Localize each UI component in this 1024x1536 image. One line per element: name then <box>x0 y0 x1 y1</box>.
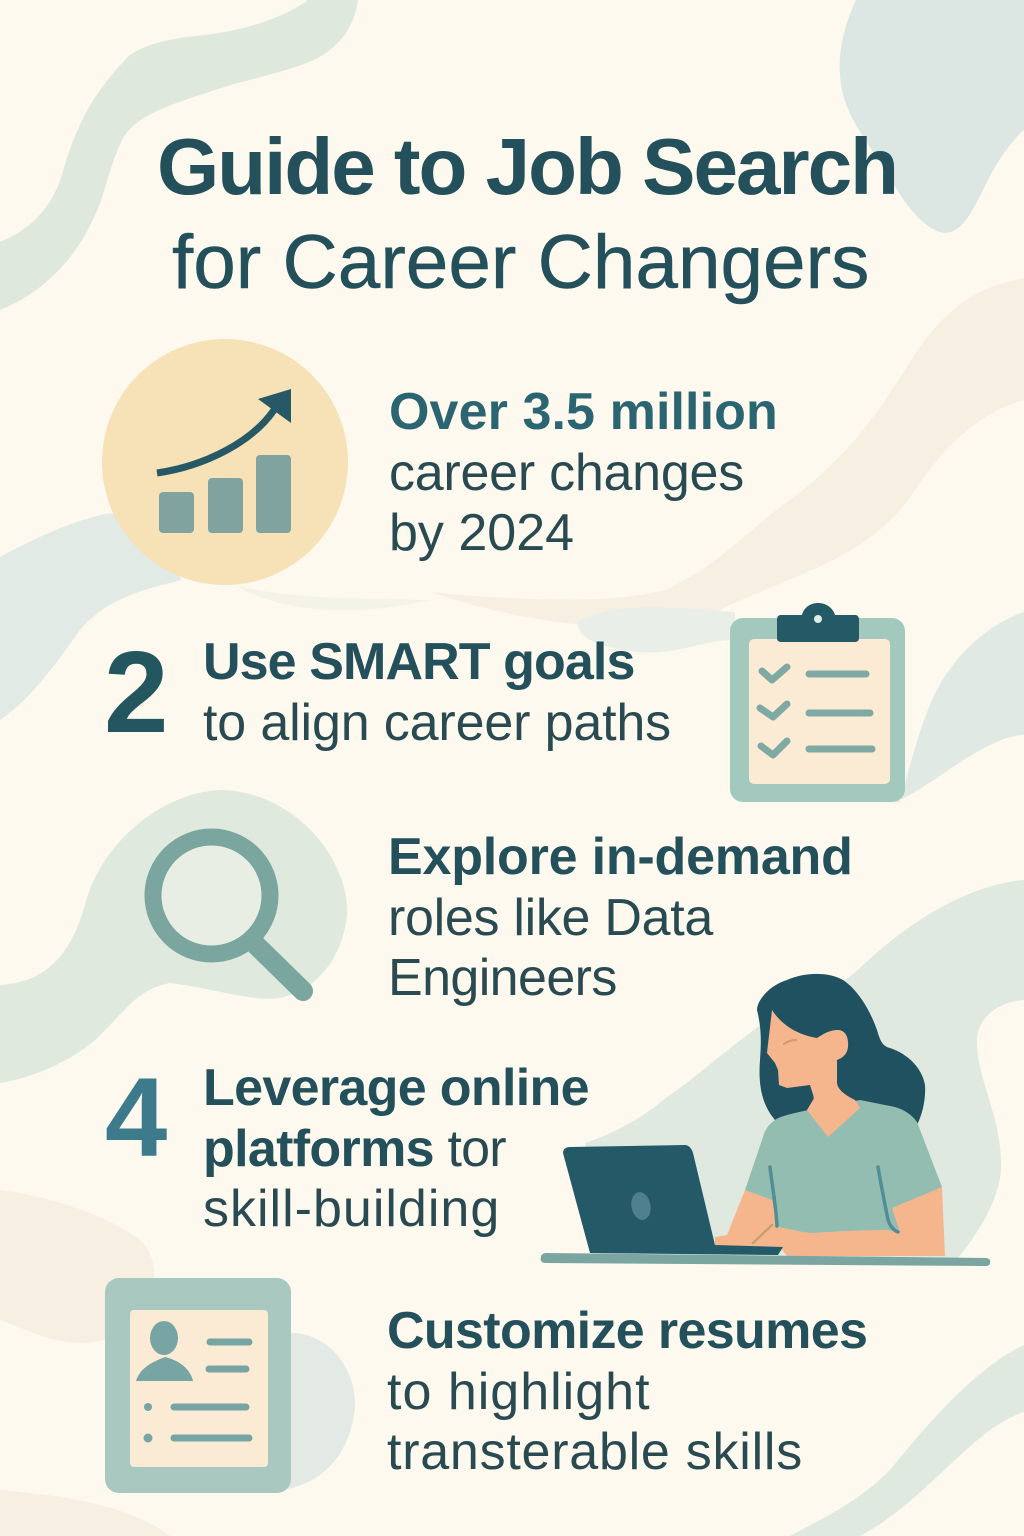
title: Guide to Job Search <box>157 122 897 211</box>
illustration: woman at laptop <box>540 974 990 1266</box>
text: customize resumes <box>387 1302 867 1481</box>
text: online platforms: platforms tor <box>203 1120 506 1178</box>
number 2: 2 <box>104 627 169 757</box>
text: in-demand roles: Explore in-demand <box>388 828 853 886</box>
text: online platforms: Leverage online <box>203 1059 589 1117</box>
icon: magnifying glass <box>144 828 313 1001</box>
number 4: 4 <box>105 1055 167 1180</box>
text: customize resumes: to highlight <box>387 1362 651 1420</box>
text: stat 1: by 2024 <box>389 504 574 562</box>
text: in-demand roles: Engineers <box>388 949 617 1007</box>
text: stat 1 <box>389 383 778 562</box>
text: customize resumes: Customize resumes <box>387 1302 867 1360</box>
icon: growth chart <box>102 339 348 585</box>
text: in-demand roles <box>388 828 853 1007</box>
text: stat 1: career changes <box>389 444 744 502</box>
icon: clipboard <box>730 603 905 802</box>
text: SMART goals: Use SMART goals <box>203 633 634 691</box>
text: customize resumes: transterable skills <box>387 1423 803 1481</box>
text: stat 1: Over 3.5 million <box>389 383 778 441</box>
text: online platforms <box>203 1059 589 1238</box>
text: SMART goals: to align career paths <box>203 694 671 752</box>
text: SMART goals <box>203 633 671 752</box>
text: in-demand roles: roles like Data <box>388 888 713 946</box>
title: for Career Changers <box>172 220 869 305</box>
icon: resume <box>105 1278 291 1493</box>
title <box>157 122 897 305</box>
text: online platforms: skill-building <box>203 1180 500 1238</box>
